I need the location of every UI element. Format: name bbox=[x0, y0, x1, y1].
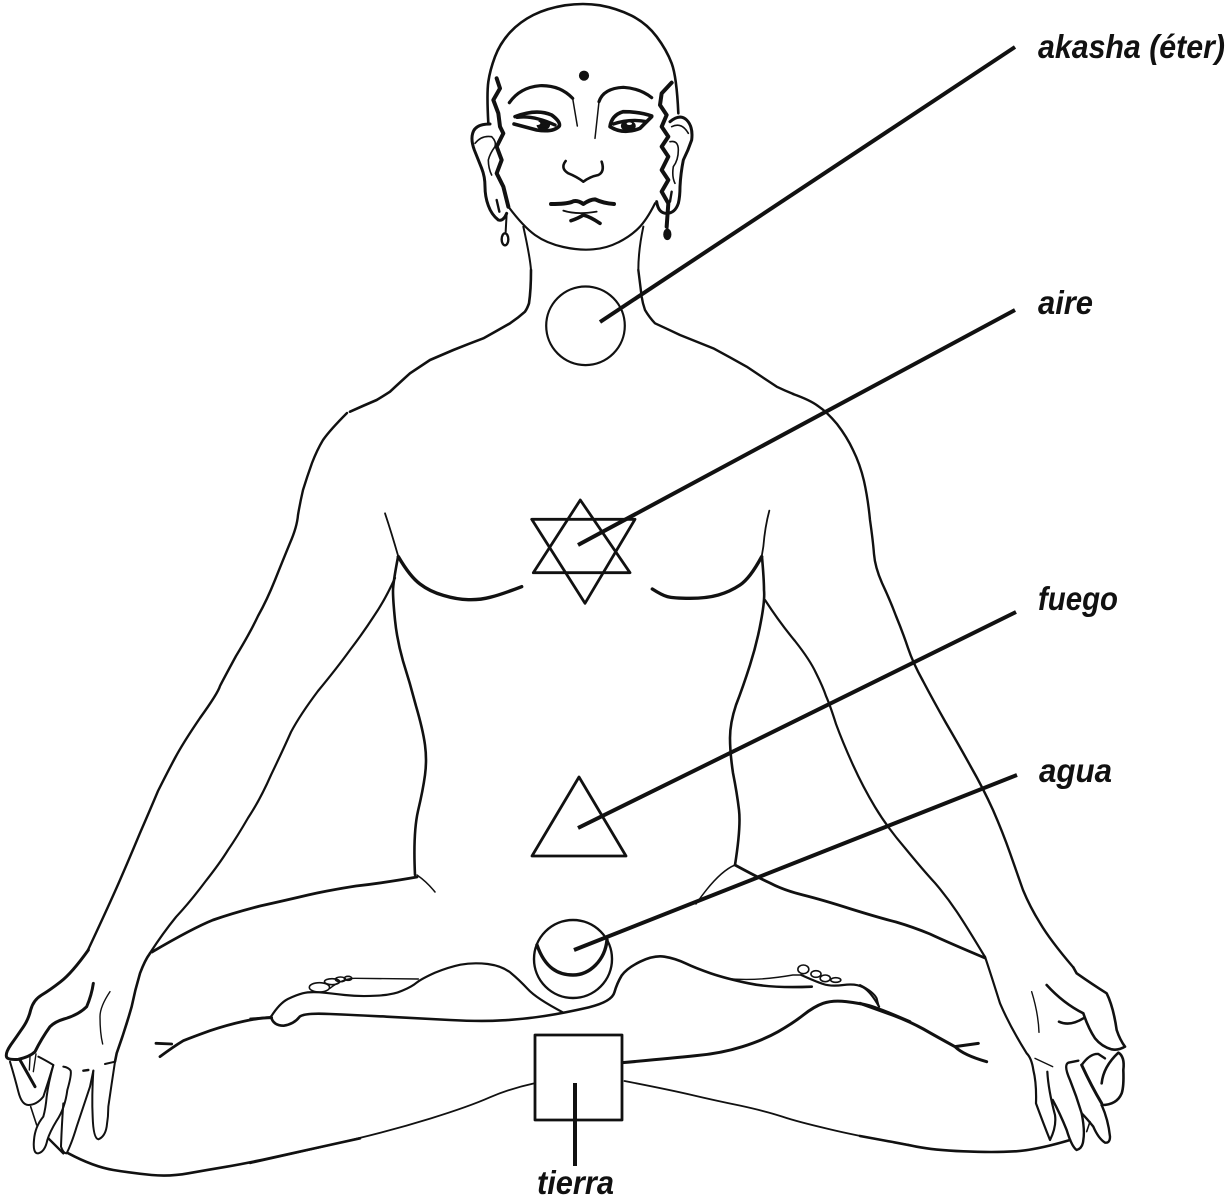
skull outline bbox=[487, 4, 678, 123]
symbol: air six-pointed star bbox=[532, 500, 635, 603]
left leg lower line bbox=[68, 1138, 360, 1176]
leader line: agua bbox=[574, 775, 1017, 950]
left knee upper line bbox=[156, 1018, 272, 1057]
left outer arm bbox=[88, 413, 347, 950]
right toes bbox=[798, 965, 841, 982]
right hip tick bbox=[696, 865, 735, 904]
neck right bbox=[638, 227, 643, 270]
nose bbox=[563, 161, 603, 182]
right ear bbox=[657, 117, 692, 213]
right arm and torso bbox=[696, 394, 1073, 967]
bindi dot bbox=[580, 72, 588, 80]
left thigh top bbox=[152, 877, 417, 952]
label: aire: aire bbox=[1038, 284, 1093, 321]
left chest line bbox=[385, 513, 522, 600]
left hip tick bbox=[417, 875, 435, 892]
left neck to shoulder bbox=[350, 270, 531, 412]
leader line: akasha bbox=[600, 47, 1015, 322]
right chest line bbox=[652, 511, 769, 598]
leader line: fuego bbox=[578, 612, 1016, 828]
right leg lower line bbox=[860, 1136, 1070, 1152]
leader line: tierra bbox=[573, 1083, 577, 1166]
symbol: water crescent bbox=[534, 920, 612, 998]
lips bbox=[551, 199, 614, 223]
neck and shoulders bbox=[350, 270, 793, 600]
right hand bbox=[985, 957, 1125, 1150]
label: fuego: fuego bbox=[1038, 580, 1118, 617]
left brow and nose line bbox=[509, 86, 577, 126]
neck left bbox=[523, 227, 531, 270]
leader line: aire bbox=[578, 310, 1015, 545]
right hair lock bbox=[660, 83, 672, 227]
left earring bbox=[502, 213, 508, 245]
right outer arm bbox=[793, 394, 1073, 967]
right foot bbox=[726, 975, 801, 979]
right thigh top bbox=[735, 865, 985, 958]
left inner arm bbox=[150, 578, 395, 953]
symbol: fire triangle bbox=[532, 777, 626, 856]
lower leg lines near square bbox=[250, 1081, 910, 1163]
right neck to shoulder bbox=[638, 270, 793, 394]
right torso side bbox=[730, 557, 764, 865]
jaw and chin bbox=[508, 203, 655, 250]
left toes bbox=[309, 976, 352, 992]
symbol: akasha circle bbox=[546, 286, 625, 365]
right brow and nose line bbox=[595, 87, 652, 138]
left hand bbox=[6, 950, 150, 1153]
right knee upper line bbox=[860, 1003, 987, 1062]
symbol: earth square bbox=[535, 1035, 622, 1120]
left eye bbox=[514, 112, 560, 131]
right eye bbox=[610, 112, 652, 131]
left arm and torso bbox=[88, 413, 435, 953]
label: tierra: tierra bbox=[537, 1164, 614, 1200]
left torso side bbox=[393, 557, 426, 875]
left foot and shin bbox=[250, 1017, 271, 1018]
element symbols bbox=[532, 286, 635, 1120]
left hair lock bbox=[493, 78, 508, 207]
right earring bbox=[664, 213, 670, 239]
label: agua: agua bbox=[1039, 752, 1112, 789]
legs and feet bbox=[68, 956, 1070, 1176]
head and face bbox=[472, 4, 692, 270]
right inner arm bbox=[765, 600, 985, 957]
left ear bbox=[472, 124, 507, 220]
